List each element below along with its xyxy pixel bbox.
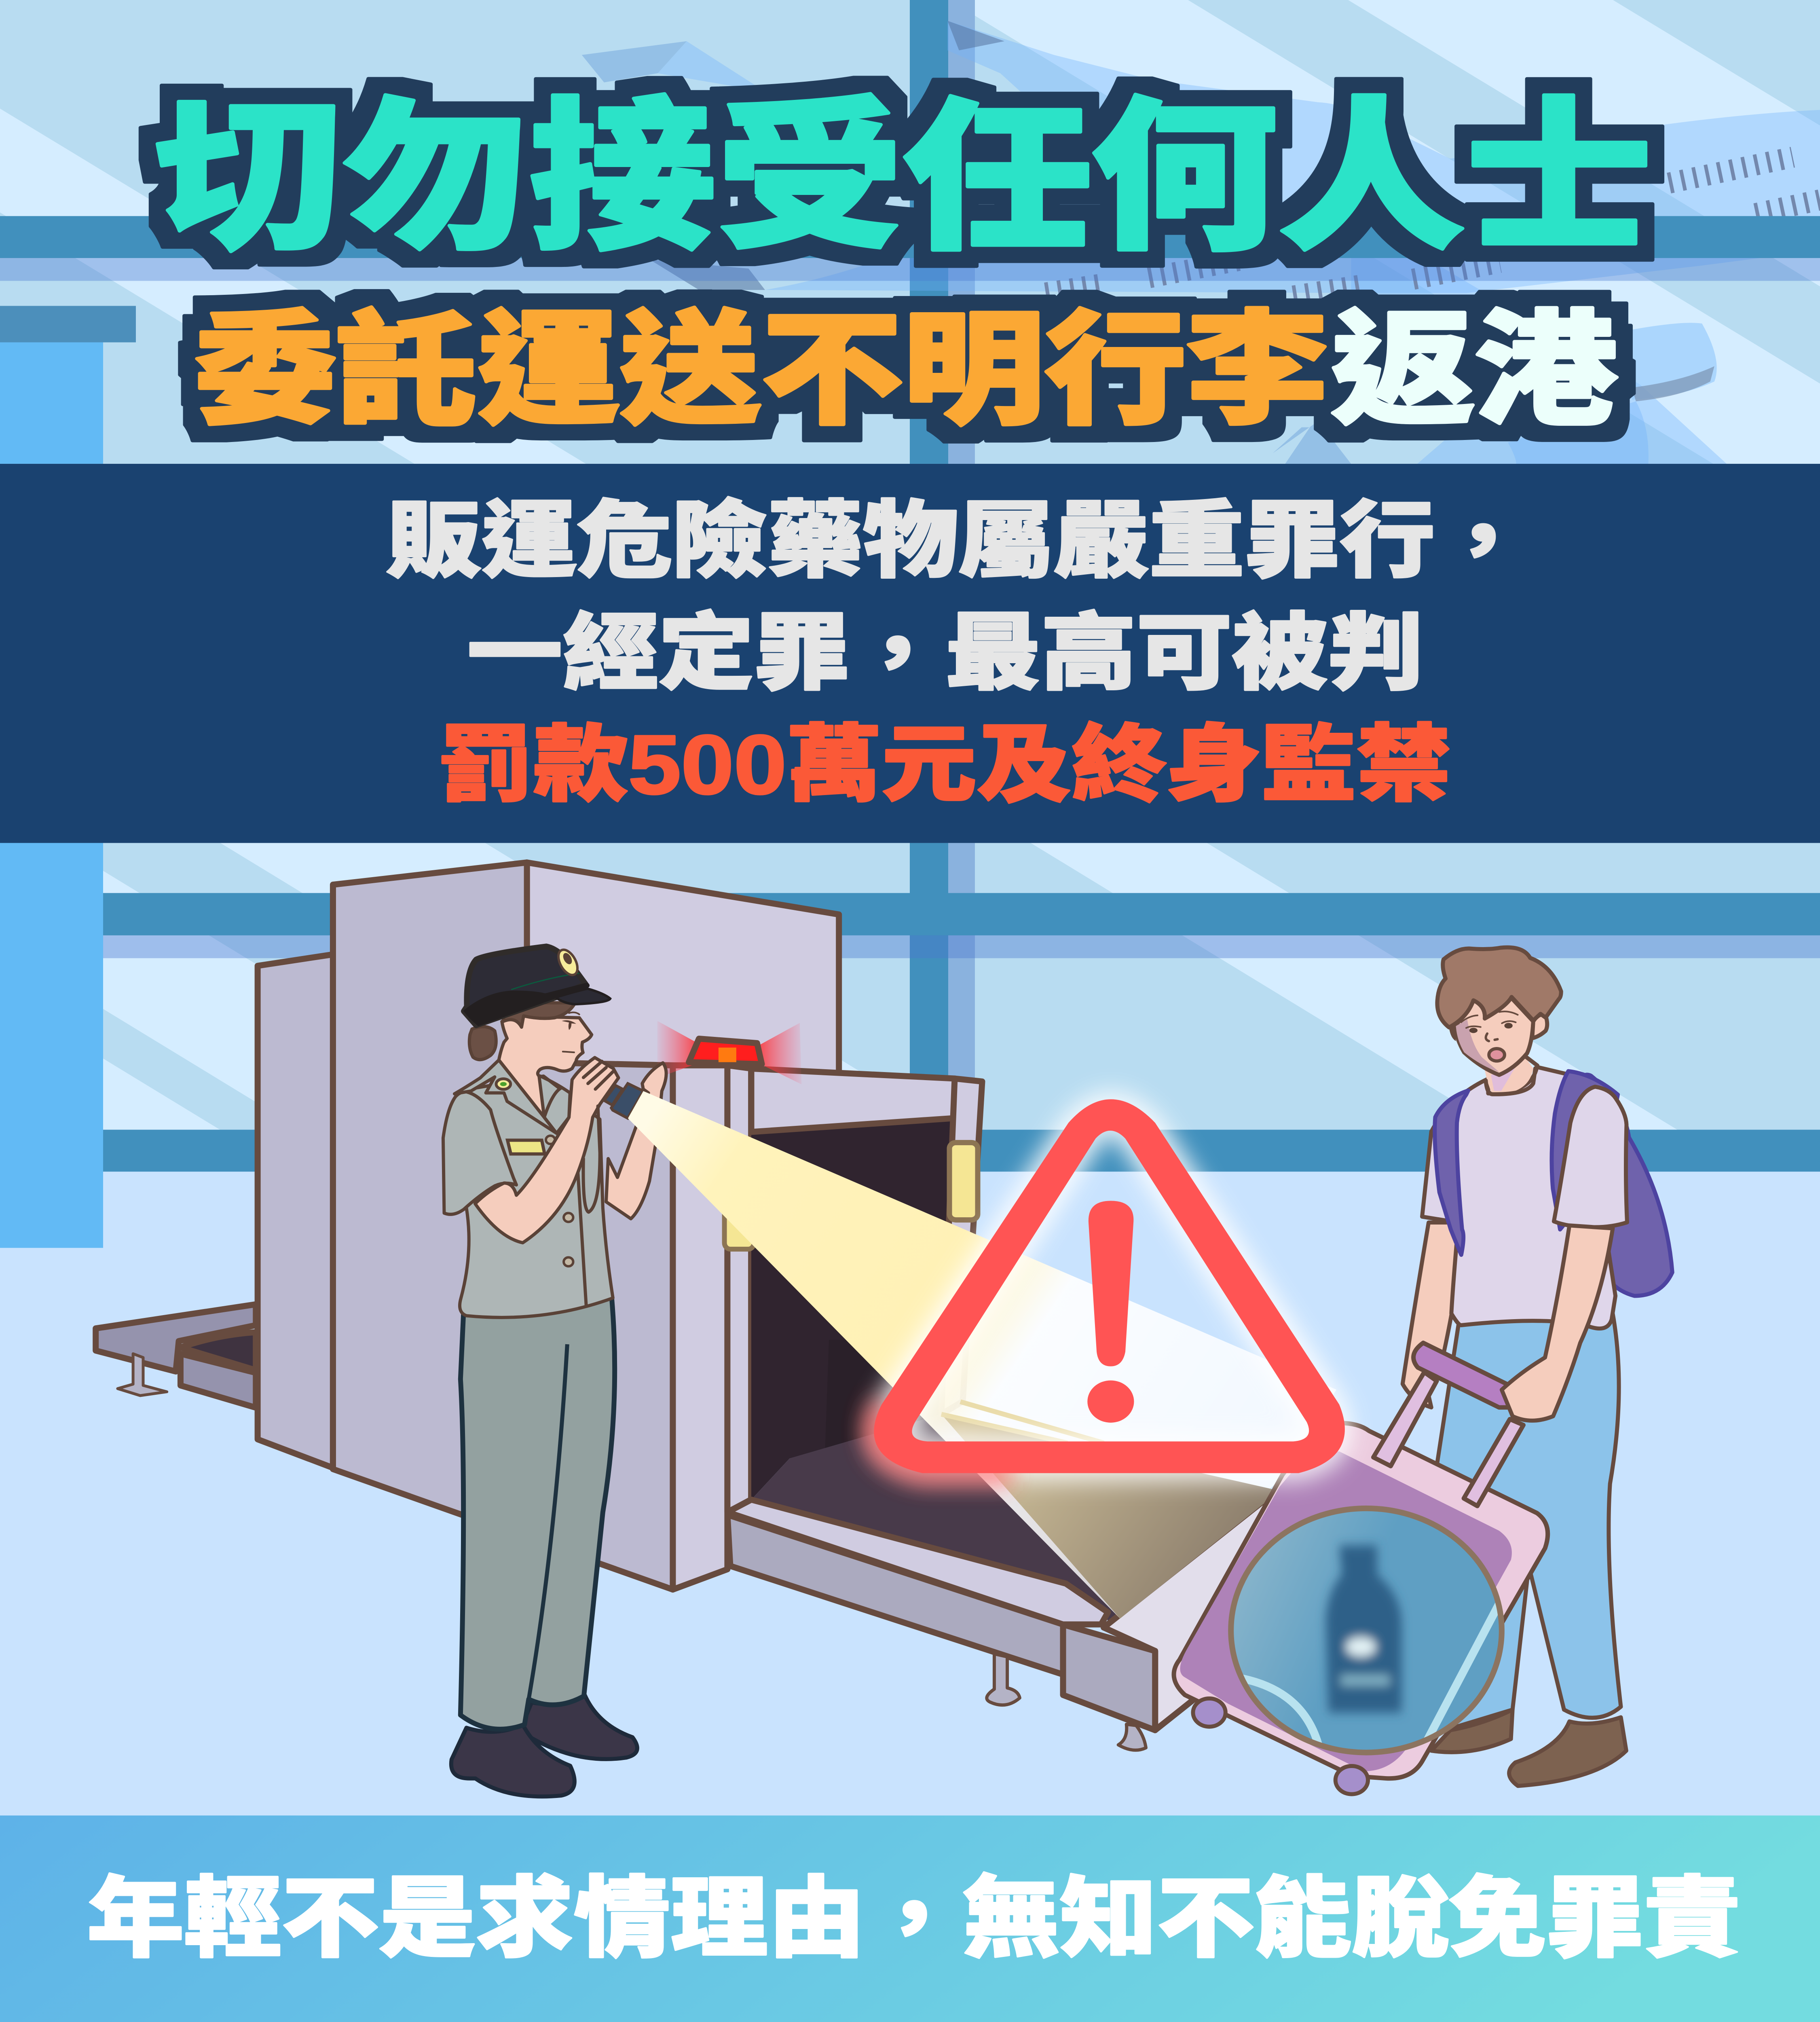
suitcase and right arm	[1174, 1225, 1613, 1794]
uniform cap	[463, 946, 610, 1026]
warning triangle	[874, 1099, 1345, 1473]
scanner body	[258, 863, 839, 1590]
background: airport window bottom	[0, 843, 1820, 1816]
officer upper body and head	[443, 946, 643, 1243]
background: airport window top	[0, 0, 1820, 464]
title line 2: 返港	[1331, 301, 1617, 439]
handle left	[725, 1176, 754, 1249]
flashlight	[604, 1083, 643, 1118]
collar	[1486, 1056, 1537, 1094]
fingers	[583, 1061, 613, 1089]
lanyard	[583, 1106, 600, 1212]
conveyor lip and body	[727, 1500, 1108, 1675]
magnifier showing hidden bottle	[1231, 1508, 1502, 1753]
officer lower body	[451, 1298, 637, 1796]
ear	[1532, 1015, 1547, 1038]
left backpack strap	[1435, 1091, 1468, 1255]
right yellow handle	[949, 1142, 978, 1220]
lit conveyor surface	[941, 1402, 1280, 1618]
flashlight beam	[628, 1091, 1336, 1618]
alarm light and left handle	[657, 1021, 801, 1249]
window frame bars top	[0, 216, 1820, 464]
name tag	[507, 1140, 545, 1154]
traveller upper body and head	[1435, 948, 1627, 1255]
airplane silhouette behind window	[582, 21, 1820, 464]
customs officer	[443, 946, 666, 1796]
left arm	[1403, 1223, 1460, 1407]
title line 2: 委託運送不明行李	[194, 301, 1328, 439]
conveyor end box	[1063, 1493, 1274, 1730]
face	[1455, 997, 1533, 1075]
exclamation mark	[1089, 1201, 1133, 1366]
officer far arm	[606, 1063, 666, 1219]
alarm lamp	[689, 1039, 762, 1064]
near shoe	[451, 1724, 575, 1796]
footer slogan: 年輕不是求情理由，無知不能脫免罪責	[87, 1869, 1741, 1968]
shirt chest far side	[540, 1076, 570, 1133]
chest button	[546, 1136, 555, 1144]
glow	[874, 1099, 1345, 1473]
hair bun	[469, 1027, 496, 1060]
hair	[503, 1003, 575, 1027]
shirt sleeve	[443, 1092, 516, 1214]
traveller lower body	[1403, 1067, 1672, 1786]
traveller	[1174, 948, 1672, 1794]
tunnel interior	[751, 1068, 1272, 1622]
T-shirt	[1422, 1067, 1615, 1328]
eye and mouth	[562, 1020, 576, 1030]
eyes and brows	[1461, 1011, 1518, 1041]
blurred bottle	[1326, 1545, 1401, 1713]
right sleeve	[1554, 1087, 1627, 1227]
warning line 1: 販運危險藥物屬嚴重罪行，	[386, 494, 1530, 588]
trousers	[1437, 1313, 1621, 1730]
near arm	[475, 1058, 619, 1243]
X-ray scanner machine	[96, 863, 1274, 1750]
right backpack strap	[1552, 1071, 1618, 1229]
suitcase	[1174, 1343, 1548, 1794]
neck	[1485, 1057, 1533, 1095]
navy warning band	[0, 464, 1820, 843]
title line 1: 切勿接受任何人士	[154, 87, 1653, 270]
hair	[1437, 948, 1561, 1028]
main title	[154, 87, 1653, 439]
mouth	[1489, 1049, 1505, 1061]
left conveyor	[96, 1304, 256, 1408]
shirt collar	[454, 1060, 557, 1133]
warning line 2: 一經定罪，最高可被判	[467, 607, 1423, 700]
shoe far	[1431, 1710, 1513, 1752]
collar badge	[496, 1079, 511, 1089]
back hair	[1449, 1027, 1456, 1041]
officer shirt torso	[460, 1076, 613, 1318]
backpack	[1569, 1075, 1672, 1296]
far shoe	[520, 1693, 637, 1759]
footer band	[0, 1815, 1820, 2022]
shoe near	[1509, 1717, 1626, 1786]
conveyor leg right	[987, 1654, 1146, 1750]
trousers	[461, 1298, 615, 1729]
face and neck	[499, 1016, 592, 1117]
right arm	[1502, 1225, 1613, 1421]
penalty line: 罰款500萬元及終身監禁	[438, 718, 1451, 812]
alarm beams	[657, 1021, 698, 1078]
triangle outline	[874, 1099, 1345, 1473]
